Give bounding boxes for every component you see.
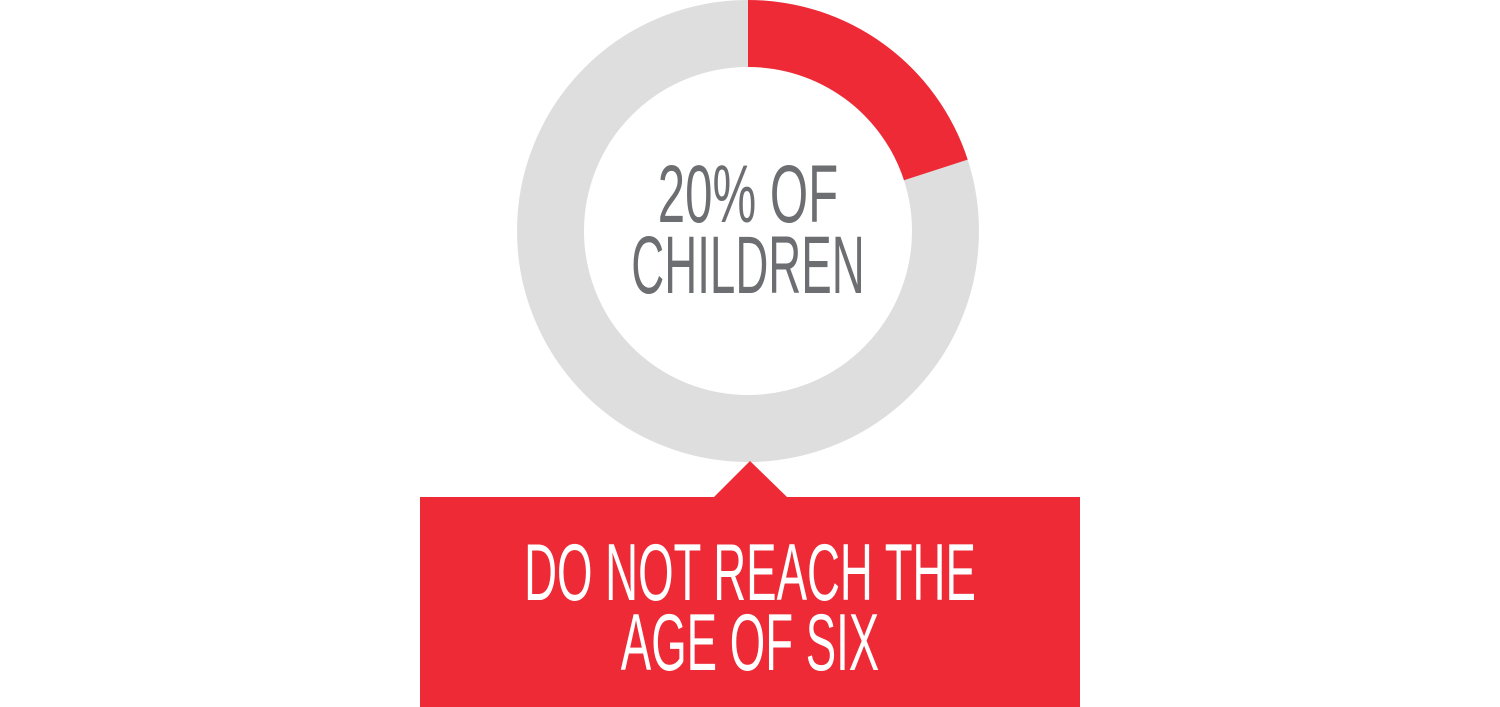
callout text: DO NOT REACH THE [524,527,976,617]
center label: 20% of children: CHILDREN [631,220,865,312]
donut chart [550,0,968,428]
center label: 20% of children: 20% OF [658,149,838,240]
center label: 20% of children [631,149,865,312]
callout text [524,527,976,687]
donut red segment 20% [748,0,968,180]
callout box [420,461,1080,707]
callout text: AGE OF SIX [621,597,879,687]
donut background ring [550,34,946,428]
callout pointer [714,461,787,497]
